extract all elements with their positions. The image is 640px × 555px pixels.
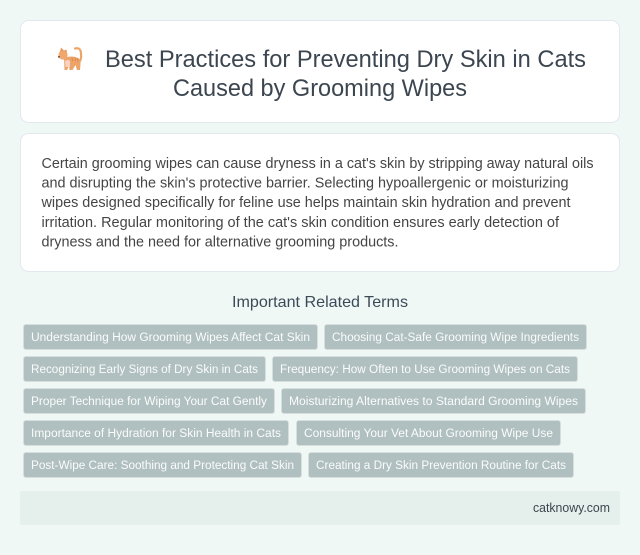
tag: Moisturizing Alternatives to Standard Grooming Wipes	[289, 394, 578, 408]
summary line 1: Certain grooming wipes can cause dryness in a cat's skin by stripping away natural oils	[42, 156, 594, 172]
tag: Proper Technique for Wiping Your Cat Gently	[31, 394, 268, 408]
footer	[20, 491, 620, 525]
tag: Creating a Dry Skin Prevention Routine for Cats	[316, 458, 566, 472]
tag: Recognizing Early Signs of Dry Skin in Cats	[31, 362, 258, 376]
tag	[24, 324, 318, 350]
tag: Understanding How Grooming Wipes Affect Cat Skin	[31, 330, 310, 344]
panel: summary text	[20, 134, 620, 272]
tag: Consulting Your Vet About Grooming Wipe Use	[304, 426, 553, 440]
section heading: Important Related Terms	[232, 294, 408, 311]
heading line 2: Caused by Grooming Wipes	[173, 75, 467, 102]
tag: Post-Wipe Care: Soothing and Protecting Cat Skin	[31, 458, 294, 472]
summary line 3: wipes designed specifically for feline use helps maintain skin hydration and prevent	[40, 195, 570, 211]
heading line 1: Best Practices for Preventing Dry Skin in Cats	[105, 46, 586, 73]
tag	[24, 420, 288, 446]
tag	[24, 388, 274, 414]
tag	[24, 452, 302, 478]
tag	[308, 452, 574, 478]
related terms tags	[24, 324, 586, 478]
icon: cat	[58, 48, 81, 70]
tag	[282, 388, 586, 414]
panel: title card	[20, 20, 620, 122]
summary line 2: and disrupting the skin's protective barrier. Selecting hypoallergenic or moisturizing	[42, 176, 568, 192]
tag	[24, 356, 266, 382]
summary line 4: irritation. Regular monitoring of the cat's skin condition ensures early detection of	[42, 215, 560, 231]
tag	[324, 324, 586, 350]
tag	[296, 420, 560, 446]
summary line 5: dryness and the need for alternative grooming products.	[42, 234, 398, 250]
tag: Importance of Hydration for Skin Health in Cats	[31, 426, 281, 440]
tag: Frequency: How Often to Use Grooming Wipes on Cats	[280, 362, 570, 376]
tag	[272, 356, 578, 382]
tag: Choosing Cat-Safe Grooming Wipe Ingredients	[332, 330, 579, 344]
footer site name: catknowy.com	[533, 500, 610, 515]
